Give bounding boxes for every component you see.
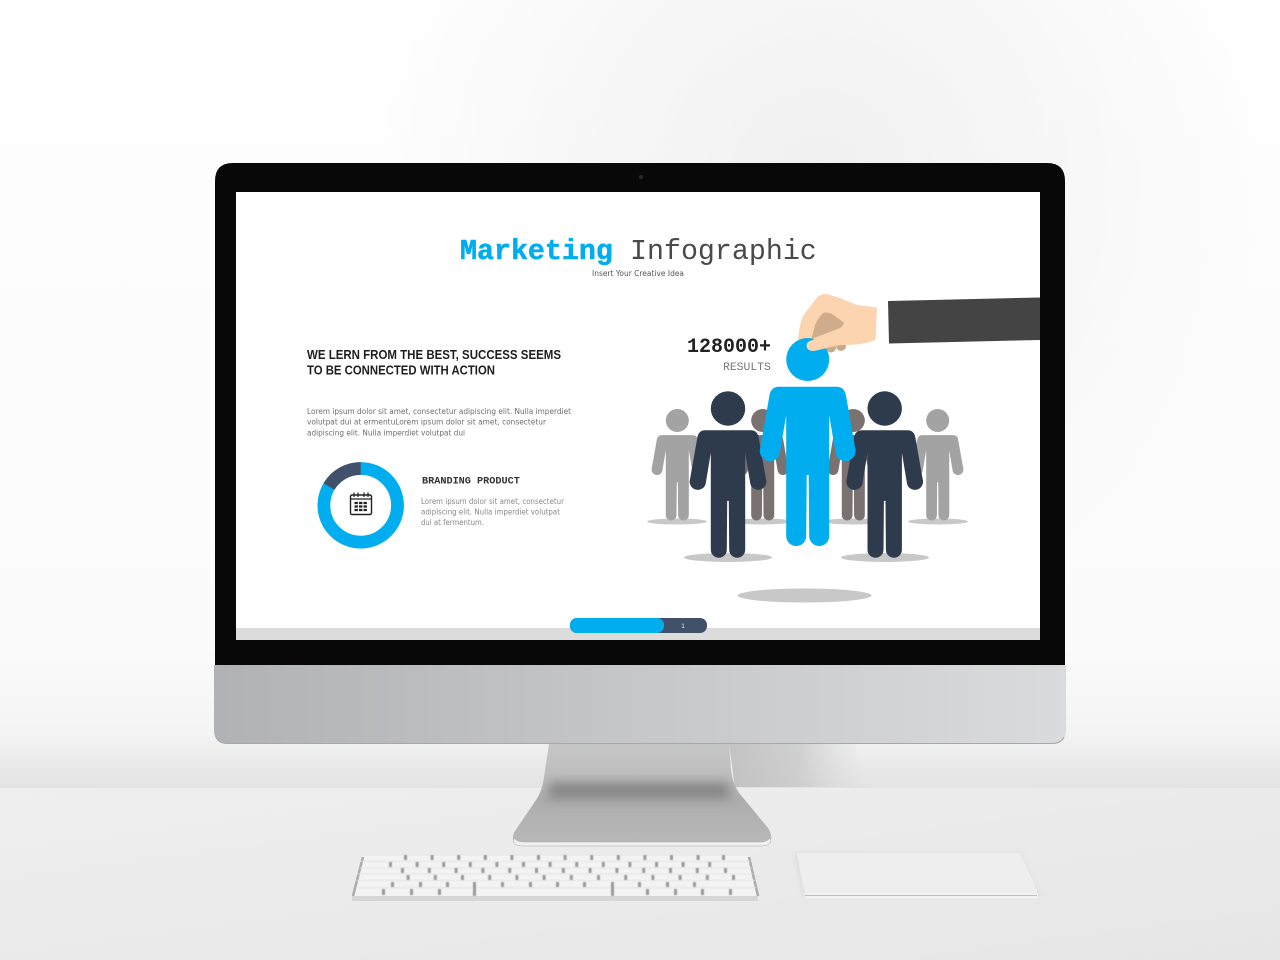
monitor stand [513, 744, 868, 846]
monitor [214, 163, 1066, 744]
title: Marketing [460, 236, 613, 268]
body text [307, 407, 571, 438]
body text: Lorem ipsum dolor sit amet, consectetur adipiscing elit. Nulla imperdiet [307, 407, 571, 416]
keyboard [352, 855, 758, 901]
subtitle: Insert Your Creative Idea [592, 269, 684, 278]
keyboard edges [353, 857, 758, 896]
branding text: Lorem ipsum dolor sit amet, consectetur [421, 497, 565, 506]
middle row figures [690, 391, 923, 558]
title [460, 236, 817, 268]
body text: adipiscing elit. Nulla imperdiet volutpat dui [307, 428, 465, 438]
headline: WE LERN FROM THE BEST, SUCCESS SEEMS [307, 348, 561, 362]
progress bar [570, 618, 707, 633]
body text: volutpat dui at ermentuLorem ipsum dolor sit amet, consectetur [307, 418, 547, 426]
back row figures [652, 409, 963, 520]
keyboard row lines [356, 862, 756, 888]
screen [236, 192, 1040, 640]
donut chart [324, 468, 398, 542]
headline: TO BE CONNECTED WITH ACTION [307, 364, 495, 378]
camera [639, 175, 643, 179]
statistic label: RESULTS [723, 362, 771, 374]
ground shadows [647, 518, 968, 602]
trackpad [794, 853, 1040, 898]
footer strip [236, 628, 1040, 640]
page number: 1 [681, 623, 685, 630]
statistic: 128000+ [687, 336, 771, 359]
title: Infographic [630, 236, 817, 268]
keyboard key gaps [382, 855, 735, 896]
suit sleeve [888, 298, 1040, 344]
headline [307, 348, 561, 378]
thumb [806, 328, 852, 351]
branding text [421, 497, 565, 527]
hand [798, 294, 877, 352]
branding heading: BRANDING PRODUCT [422, 476, 520, 488]
desk surface [0, 788, 1280, 960]
selected blue figure [760, 338, 856, 546]
palm shade [812, 312, 844, 339]
branding text: adipiscing elit. Nulla imperdiet volutpat [421, 508, 560, 516]
icon: calendar [350, 492, 372, 514]
monitor bezel [215, 163, 1065, 665]
branding text: dui at fermentum. [421, 518, 484, 527]
monitor chin [214, 665, 1066, 744]
